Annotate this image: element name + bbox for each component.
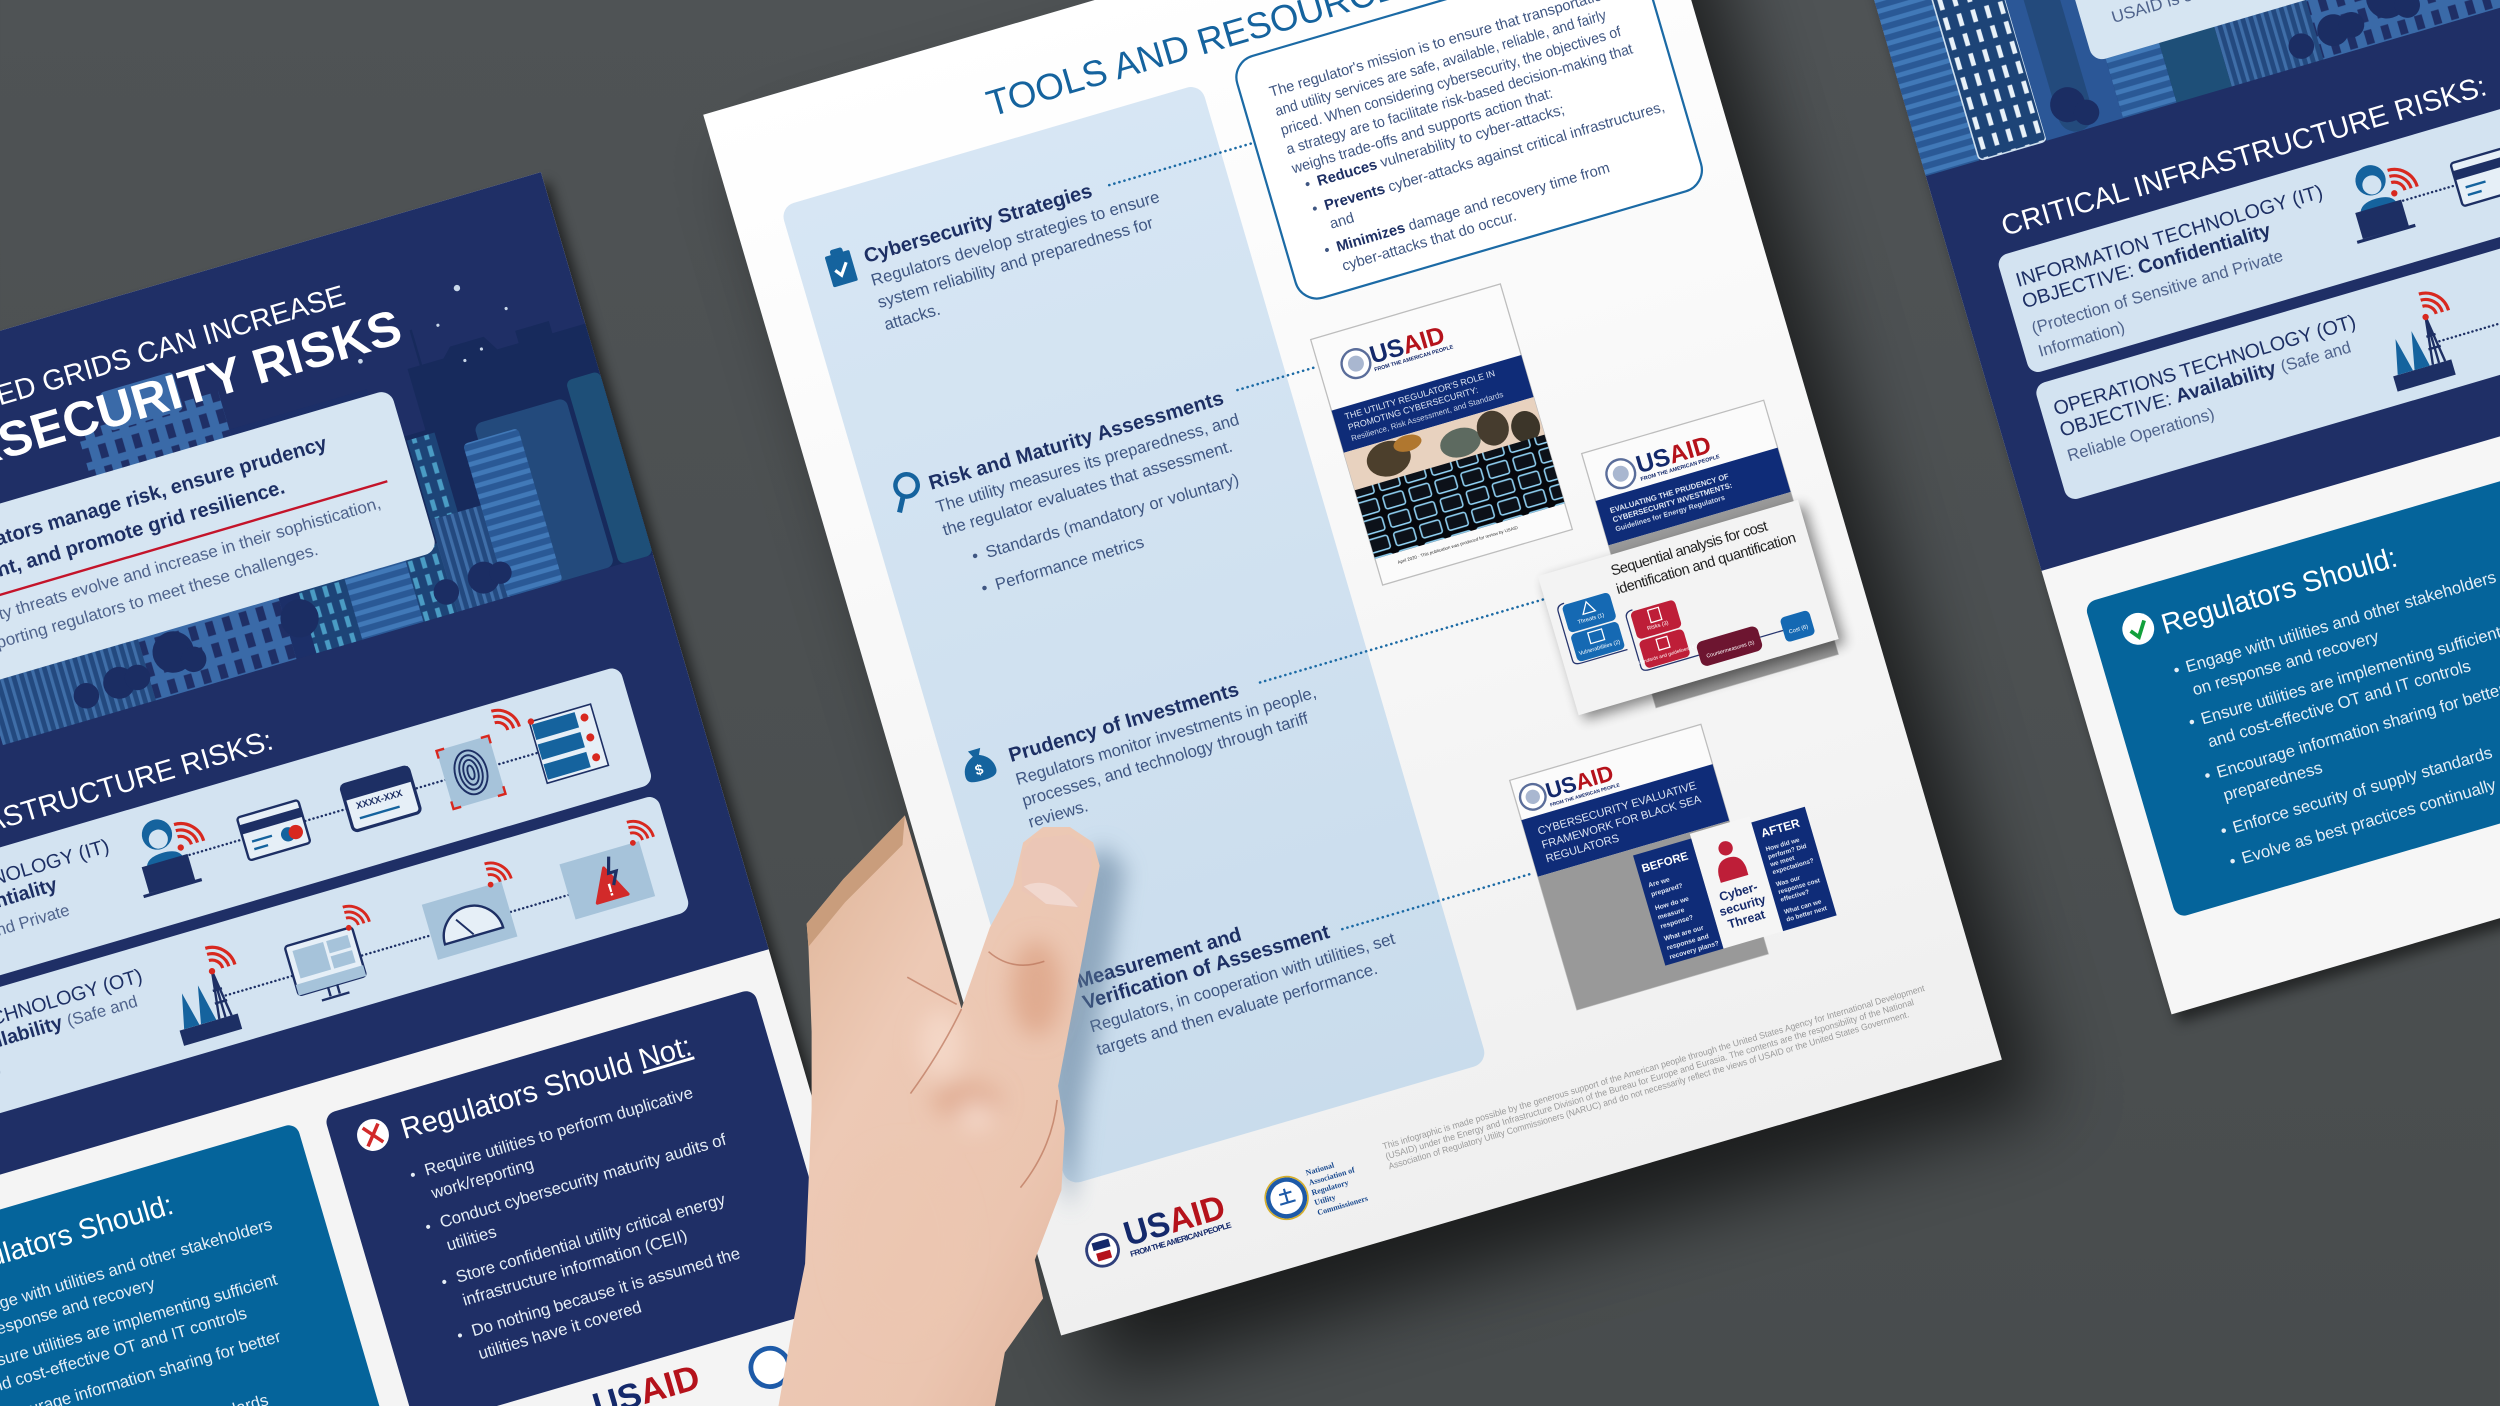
OT risk row: Reliable Operations) — [2065, 404, 2217, 465]
IT risk row — [1996, 12, 2500, 375]
card: sequential analysis diagram: identification and quantification — [1615, 530, 1798, 598]
OT risk row: OPERATIONS TECHNOLOGY (OT) — [2051, 311, 2359, 420]
logo: NARUC — [1260, 1154, 1369, 1230]
before and after card: perform? Did — [1767, 843, 1808, 861]
logo: USAID: FROM THE AMERICAN PEOPLE — [1374, 344, 1455, 373]
mission box: • — [1322, 242, 1332, 259]
icon: wifi signal — [482, 858, 512, 888]
before and after card: do better next — [1786, 905, 1829, 924]
report cover 1: April 2020 · This publication was produced for review by USAID — [1397, 525, 1518, 565]
icon: ID card — [340, 766, 421, 832]
logo: NARUC seal — [746, 1344, 794, 1391]
logo: USAID footer — [1080, 1188, 1233, 1270]
logo: NARUC: Regulatory — [1310, 1178, 1350, 1197]
icon: credit card — [2450, 146, 2500, 206]
icon: alert — [559, 841, 655, 919]
item: risk and maturity assessments: Performance metrics — [993, 532, 1146, 594]
paper — [0, 172, 899, 1406]
icon: person at laptop — [124, 811, 202, 898]
icon: money bag: $ — [973, 762, 985, 779]
panel: regulators should not: utilities — [444, 1222, 499, 1255]
card: sequential analysis diagram — [1538, 500, 1839, 715]
navy header — [0, 172, 769, 1225]
logo: NARUC: Utility — [1313, 1192, 1337, 1207]
before and after card: Are we — [1648, 876, 1671, 889]
before and after card: How do we — [1654, 896, 1690, 912]
report cover 2 — [1582, 400, 1838, 708]
mission box: a strategy are to facilitate risk-based decision-making that — [1285, 41, 1635, 158]
item: cybersecurity strategies — [823, 157, 1175, 345]
report cover 3 — [1510, 724, 1768, 1010]
item: measurement and verification: targets and then evaluate performance. — [1094, 959, 1380, 1059]
leader line: measurement to report — [1342, 873, 1534, 929]
icon: money bag — [959, 745, 998, 785]
IT risk row — [0, 666, 654, 1029]
panel: regulators should not: Do nothing because it is assumed the — [469, 1244, 742, 1340]
intro card — [0, 389, 438, 713]
OT risk row — [0, 794, 691, 1156]
icon: green check — [2118, 609, 2158, 649]
before and after card: How did we — [1765, 837, 1801, 853]
logo: USAID — [1338, 320, 1455, 382]
before and after card: Was our — [1775, 875, 1802, 888]
before and after card — [1632, 801, 1837, 966]
panel: regulators should not: utilities have it covered — [476, 1297, 644, 1363]
panel: regulators should: • — [2227, 851, 2238, 871]
panel: regulators should — [2084, 475, 2500, 918]
logo: USAID footer: FROM THE AMERICAN PEOPLE — [1129, 1221, 1233, 1259]
report cover 1: PROMOTING CYBERSECURITY: — [1347, 385, 1479, 432]
icon: person at laptop — [2337, 157, 2416, 244]
item: risk and maturity assessments: Risk and Maturity Assessments — [926, 387, 1226, 495]
card: sequential analysis diagram: Sequential analysis for cost — [1609, 519, 1770, 580]
before and after card: effective? — [1780, 889, 1810, 904]
thumb shadow — [1044, 845, 1126, 1212]
mission box: • — [1310, 201, 1320, 218]
report cover 3: REGULATORS — [1545, 833, 1621, 865]
icon: wifi signal — [202, 942, 236, 975]
leader line: strategies to mission box — [1109, 143, 1255, 185]
logo: NARUC: Commissioners — [1316, 1194, 1369, 1217]
center infographic sheet: tools and resources — [703, 0, 2002, 1335]
hand holding the sheet — [778, 815, 1100, 1406]
item: risk and maturity assessments: The utility measures its preparedness, and — [934, 410, 1241, 517]
before and after card: expectations? — [1772, 857, 1815, 876]
logo: USAID footer: USAID — [1119, 1188, 1230, 1254]
skin creases — [907, 952, 1057, 1188]
item: measurement and verification: Measurement and — [1074, 924, 1244, 993]
icon: wifi signal — [2416, 287, 2449, 321]
item: risk and maturity assessments: the regulator evaluates that assessment. — [940, 437, 1235, 540]
leader line: assessments to report — [1237, 367, 1317, 390]
hand silhouette — [778, 815, 1100, 1406]
logo: NARUC: National — [1305, 1160, 1336, 1177]
IT risk row: INFORMATION TECHNOLOGY (IT) — [2013, 181, 2325, 292]
icon: wifi signal — [624, 816, 654, 846]
icon: red cross — [353, 1115, 393, 1155]
icon: transmission tower and trees — [2380, 313, 2456, 392]
panel: regulators should: Enforce security of supply standards — [2230, 743, 2494, 837]
mission box: priced. When considering cybersecurity, the objectives of — [1279, 24, 1624, 139]
OT risk row: OBJECTIVE: Availability (Safe and — [2057, 336, 2354, 442]
upper edge of the hand — [807, 815, 905, 947]
report cover 3: FRAMEWORK FOR BLACK SEA — [1540, 793, 1703, 852]
before and after card: What are our — [1663, 924, 1705, 943]
panel: regulators should: Encourage information sharing for better — [2214, 679, 2500, 782]
card shadow — [1544, 505, 1845, 720]
logo: USAID: USAID — [1633, 432, 1714, 479]
mission box: cyber-attacks that do occur. — [1340, 208, 1519, 275]
icon: threat figure — [1710, 837, 1748, 883]
report cover 3: CYBERSECURITY EVALUATIVE — [1536, 780, 1698, 838]
card: sequential analysis diagram: Countermeasures (5) — [1706, 640, 1755, 660]
before and after card: Cyber- — [1718, 880, 1759, 904]
panel: regulators should: and cost-effective OT and IT controls — [2205, 656, 2473, 751]
card: sequential analysis diagram: Cost (6) — [1788, 624, 1809, 635]
disclaimer: Association of Regulatory Utility Commissioners (NARUC) and do not necessarily reflect the views of USAID or the United States Government. — [1387, 1009, 1910, 1171]
item: risk and maturity assessments: • — [970, 546, 981, 566]
panel: regulators should: Regulators Should: — [2158, 542, 2401, 641]
before and after card: Threat — [1726, 907, 1767, 931]
icon: wifi signal — [2385, 164, 2418, 197]
before and after card: AFTER — [1759, 816, 1802, 840]
paper — [1814, 0, 2500, 1014]
left infographic sheet — [0, 172, 899, 1406]
item: prudency of investments: Prudency of Investments — [1006, 679, 1242, 767]
icon: credit card — [237, 800, 311, 861]
item: cybersecurity strategies: system reliability and preparedness for — [875, 213, 1156, 312]
before and after card: we meet — [1768, 854, 1796, 869]
icon: wifi signal — [171, 818, 205, 851]
report cover 2: CYBERSECURITY INVESTMENTS: — [1611, 481, 1733, 524]
icon: wifi signal — [491, 705, 519, 733]
section heading: CRITICAL INFRASTRUCTURE RISKS: — [1998, 70, 2490, 243]
icon: fingerprint — [436, 736, 506, 809]
panel: regulators should not: Regulators Should Not: — [397, 1030, 695, 1146]
IT risk row: Information) — [2036, 317, 2127, 361]
panel: regulators should not: Require utilities to perform duplicative — [422, 1083, 695, 1180]
icon: transmission tower and trees — [166, 968, 242, 1046]
IT risk row: OBJECTIVE: Confidentiality — [2020, 220, 2273, 313]
panel: tools list — [780, 84, 1488, 1186]
right infographic sheet — [1814, 0, 2500, 1014]
before and after card: recovery plans? — [1669, 940, 1720, 961]
panel: regulators should: on response and recovery — [2190, 626, 2382, 699]
card: sequential analysis diagram: Threats (1) — [1577, 612, 1605, 626]
icon: alert: ! — [605, 879, 616, 900]
item: prudency of investments — [959, 653, 1331, 845]
report cover 1: THE UTILITY REGULATOR'S ROLE IN — [1344, 368, 1496, 422]
panel: regulators should: • — [2218, 821, 2229, 841]
icon: ID card: XXXX-XXX — [355, 788, 404, 812]
disclaimer: (USAID) under the Energy and Infrastructure Division of the Bureau for Europe and Eurasia. The contents are the responsibility of the National — [1384, 997, 1915, 1161]
nail lunula — [1024, 883, 1078, 907]
mission box — [1231, 0, 1707, 304]
logo: USAID: FROM THE AMERICAN PEOPLE — [1640, 454, 1721, 483]
report cover 2: Guidelines for Energy Regulators — [1614, 494, 1726, 533]
panel: regulators should: • — [2186, 712, 2197, 732]
item: cybersecurity strategies: Cybersecurity Strategies — [861, 180, 1095, 268]
before and after card: response cost — [1778, 877, 1822, 896]
before and after card: What can we — [1783, 898, 1823, 916]
mission box: and utility services are safe, available, reliable, and fairly — [1273, 8, 1609, 120]
intro card — [2045, 0, 2500, 62]
logo: USAID: USAID — [1367, 322, 1448, 369]
left sheet shadow — [0, 182, 907, 1406]
panel: regulators should: • — [2202, 766, 2213, 785]
item: risk and maturity assessments — [890, 380, 1267, 614]
center sheet shadow — [749, 0, 2048, 1380]
item: measurement and verification: Regulators, in cooperation with utilities, set — [1088, 929, 1397, 1036]
icon: wifi signal — [340, 901, 370, 931]
leader line: prudency to card — [1260, 599, 1543, 682]
icon: magnifier — [890, 472, 924, 512]
before and after card: response and — [1666, 933, 1710, 952]
thumbnail — [1022, 835, 1091, 908]
panel: regulators should not: work/reporting — [428, 1155, 536, 1203]
logo: USAID: FROM THE AMERICAN PEOPLE — [1549, 782, 1621, 809]
panel: regulators should not: Store confidential utility critical energy — [454, 1190, 728, 1287]
card: sequential analysis diagram: Risks (3) — [1647, 620, 1670, 632]
item: cybersecurity strategies: Regulators develop strategies to ensure — [869, 187, 1162, 290]
OT risk row — [2034, 140, 2500, 502]
before and after card: BEFORE — [1640, 850, 1690, 875]
panel: regulators should — [0, 1123, 389, 1406]
mission box: Minimizes damage and recovery time from — [1335, 160, 1612, 256]
disclaimer: This infographic is made possible by the generous support of the American people through the United States Agency for International Development — [1381, 983, 1926, 1151]
card: sequential analysis diagram: Standards and guidelines (4) — [1636, 644, 1697, 667]
icon: server rack — [527, 701, 608, 784]
navy header — [1814, 0, 2500, 571]
report cover 2: EVALUATING THE PRUDENCY OF — [1609, 472, 1730, 515]
item: measurement and verification: Verification of Assessment — [1080, 921, 1332, 1014]
city skyline — [1856, 0, 2500, 176]
IT risk row: (Protection of Sensitive and Private — [2029, 246, 2285, 338]
icon: clipboard — [823, 245, 858, 288]
card: sequential analysis diagram: Vulnerabilities (2) — [1578, 639, 1621, 657]
item: prudency of investments: processes, and technology through tariff — [1020, 708, 1311, 810]
cover image: keyboard and world map — [1344, 397, 1565, 559]
item: risk and maturity assessments: Standards (mandatory or voluntary) — [983, 470, 1241, 562]
item: measurement and verification — [1074, 883, 1404, 1059]
item: prudency of investments: Regulators monitor investments in people, — [1013, 683, 1318, 789]
panel: regulators should not: infrastructure information (CEII) — [460, 1226, 690, 1310]
logo: NARUC: Association of — [1308, 1165, 1356, 1187]
panel: regulators should: preparedness — [2221, 758, 2325, 805]
panel: regulators should: Engage with utilities and other stakeholders — [2183, 567, 2498, 676]
mission box: • — [1303, 177, 1313, 193]
panel: regulators should not — [324, 989, 846, 1406]
report cover 1 — [1311, 284, 1572, 585]
panel: regulators should: • — [2171, 660, 2182, 680]
mission box: weighs trade-offs and supports action that: — [1289, 86, 1555, 178]
item: prudency of investments: reviews. — [1026, 796, 1090, 832]
logo: USAID — [1602, 430, 1721, 492]
right sheet shadow — [1821, 0, 2500, 1023]
mission box: Prevents cyber-attacks against critical infrastructures, — [1323, 99, 1667, 214]
before and after card: measure — [1657, 907, 1686, 921]
mission box: Reduces vulnerability to cyber-attacks; — [1315, 102, 1566, 190]
before and after card: response? — [1660, 914, 1694, 931]
before and after card: prepared? — [1650, 883, 1684, 898]
before and after card: security — [1718, 892, 1767, 919]
item: risk and maturity assessments: • — [979, 578, 990, 598]
icon: monitor — [285, 927, 369, 1006]
city skyline — [0, 253, 653, 745]
skin shading — [837, 941, 1062, 1339]
logo: USAID: USAID — [1543, 760, 1616, 804]
panel: regulators should not: Conduct cybersecurity maturity audits of — [438, 1130, 729, 1232]
paper — [703, 0, 2002, 1335]
panel: regulators should: Ensure utilities are implementing sufficient — [2199, 622, 2500, 728]
report cover 1: Resilience, Risk Assessment, and Standards — [1350, 390, 1504, 443]
logo: USAID — [1517, 759, 1621, 816]
item: cybersecurity strategies: attacks. — [882, 300, 942, 334]
mission box: and — [1328, 210, 1356, 233]
icon: gauge — [422, 881, 517, 960]
